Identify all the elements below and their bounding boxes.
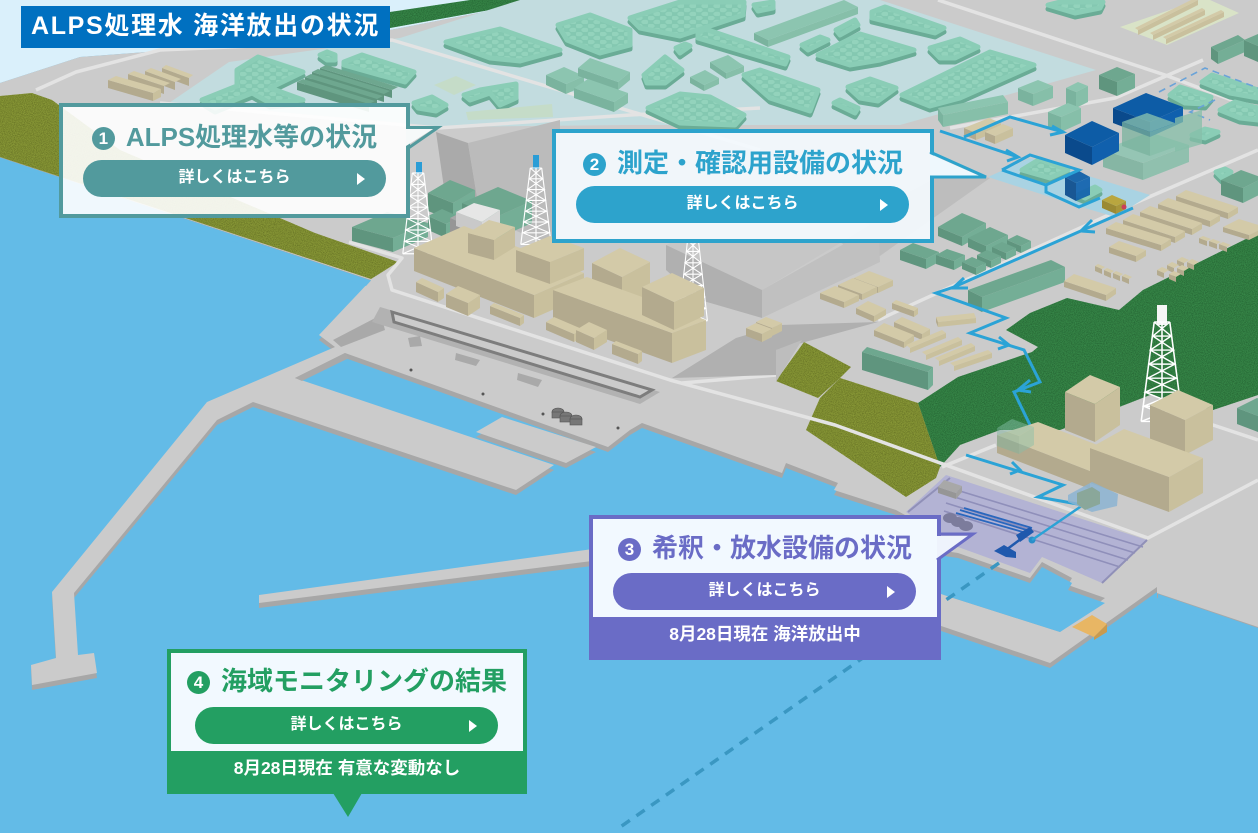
heading: 4 — [194, 673, 203, 692]
green buildings behind reactors — [352, 180, 532, 252]
gray and white rooftop buildings — [450, 203, 500, 242]
dashed undersea tunnel — [616, 563, 999, 830]
green forest hills — [918, 233, 1258, 467]
translucent intake buildings — [997, 419, 1118, 512]
panel: sea area monitoring results — [167, 649, 527, 794]
heading: 海域モニタリングの結果 — [221, 666, 507, 696]
left olive hillside — [0, 93, 398, 279]
status text: 8月28日現在 海洋放出中 — [669, 624, 861, 644]
harbour oil tanks — [552, 408, 582, 425]
reactor buildings east — [546, 248, 782, 364]
status text: 8月28日現在 有意な変動なし — [234, 758, 460, 778]
beige bars top left — [108, 65, 193, 101]
east reactor buildings — [997, 375, 1213, 512]
discharge facility area — [906, 475, 1147, 583]
dark forest strip at top — [390, 0, 545, 28]
heading: 2 — [590, 155, 599, 174]
top right pale zone — [1120, 0, 1239, 45]
transmission tower 4 — [1141, 305, 1183, 421]
dark green long storage bars — [297, 65, 398, 112]
tank yard zone — [169, 0, 1096, 127]
gray turbine halls — [436, 120, 880, 318]
transmission tower 2 — [521, 155, 551, 244]
button: 詳しくはこちら — [290, 716, 402, 733]
dashed area outline top right — [1159, 68, 1258, 120]
button — [83, 160, 386, 197]
button: 詳しくはこちら — [708, 582, 820, 599]
orange wave blocks — [1072, 615, 1107, 640]
blue flow arrows through the site — [936, 117, 1133, 540]
reactor buildings west — [414, 220, 584, 326]
panel: dilution and discharge facility status — [589, 515, 941, 660]
panel: measurement facility status — [552, 129, 987, 243]
panel: ALPS treated water status — [59, 103, 443, 218]
gray valley — [672, 170, 990, 382]
button — [613, 573, 916, 610]
discharge building — [938, 480, 962, 499]
green utility buildings — [862, 34, 1258, 432]
heading: ALPS処理水等の状況 — [126, 122, 377, 152]
measurement facility zone — [988, 158, 1150, 217]
button: 詳しくはこちら — [686, 195, 798, 212]
measurement buildings — [1065, 93, 1202, 214]
tower behind buildings: stack 3 — [679, 240, 707, 321]
heading: 3 — [625, 540, 634, 559]
olive hills — [776, 342, 940, 497]
quay rim and dark frame — [295, 307, 660, 430]
button — [576, 186, 909, 223]
pale low buildings — [434, 76, 553, 120]
title: ALPS処理水 海洋放出の状況 — [31, 12, 380, 40]
button: 詳しくはこちら — [178, 169, 290, 186]
inner basin — [905, 545, 1105, 632]
title — [21, 6, 390, 48]
dilution pipes and tanks — [943, 505, 1083, 558]
heading: 1 — [99, 129, 108, 148]
beige warehouse bars — [820, 0, 1258, 371]
button — [195, 707, 498, 744]
transmission tower 1 — [403, 162, 433, 254]
sea edge correction — [0, 158, 1258, 636]
sky — [0, 0, 545, 83]
heading: 測定・確認用設備の状況 — [617, 148, 903, 178]
roads — [36, 0, 1258, 538]
water tanks — [202, 2, 1258, 198]
heading: 希釈・放水設備の状況 — [652, 533, 912, 563]
teal storage buildings — [546, 0, 1088, 132]
